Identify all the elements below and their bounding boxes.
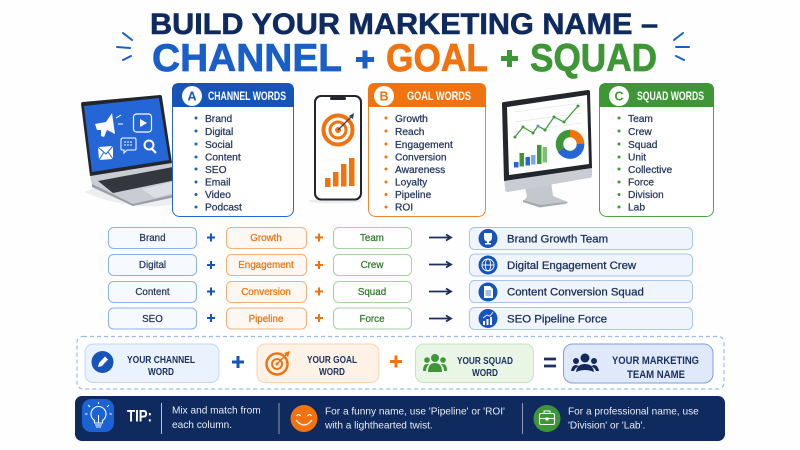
squad word list: Lab (628, 202, 645, 214)
example row 3: Squad (358, 287, 386, 298)
panel: goal words (368, 83, 486, 216)
icon: briefcase (534, 405, 560, 432)
icon: monitor with charts (502, 90, 592, 208)
panel header B: GOAL WORDS (407, 91, 471, 103)
goal word list (384, 114, 453, 214)
icon: light bulb (82, 399, 114, 432)
channel word list: Content (205, 152, 241, 164)
title: BUILD YOUR MARKETING NAME – (150, 8, 658, 41)
example row 3: Content (135, 287, 170, 298)
title: CHANNEL (152, 37, 342, 80)
squad word list: Unit (628, 152, 646, 164)
title: SQUAD (530, 37, 657, 80)
tip 2 text (324, 406, 505, 432)
panel header B: B (379, 90, 389, 104)
example row 2 (108, 254, 692, 276)
channel word list: Digital (205, 127, 233, 138)
example row 1 (108, 228, 692, 250)
example row 2: Digital Engagement Crew (507, 260, 637, 272)
example row 4: Pipeline (249, 314, 284, 325)
formula: goal word (257, 344, 379, 382)
title: GOAL (386, 37, 488, 80)
panel header C: C (614, 90, 624, 104)
panel header B (368, 83, 486, 107)
channel word list (194, 114, 242, 214)
formula: squad word: WORD (472, 368, 498, 379)
squad word list (618, 114, 672, 214)
goal word list: Reach (395, 127, 424, 138)
example row 1: Brand Growth Team (507, 234, 608, 246)
formula: channel word: WORD (148, 367, 174, 378)
panel header A: CHANNEL WORDS (208, 91, 286, 103)
panel: squad words (599, 83, 714, 216)
tip label: TIP: (127, 408, 152, 426)
channel word list: SEO (205, 165, 227, 176)
tip 3 text (568, 406, 699, 432)
goal word list: Growth (395, 114, 428, 125)
example row 3: Content Conversion Squad (507, 286, 644, 298)
equals (544, 359, 556, 366)
example row 1: Brand (139, 233, 166, 244)
squad word list: Force (628, 178, 654, 188)
example row 4: SEO Pipeline Force (507, 314, 607, 326)
icon: left accent marks (117, 33, 132, 60)
tip 3 text: For a professional name, use (568, 406, 699, 418)
goal word list: Awareness (395, 165, 445, 176)
formula: goal word: WORD (319, 367, 345, 378)
plus (390, 356, 402, 368)
formula: squad word: YOUR SQUAD (457, 356, 513, 367)
goal word list: Loyalty (395, 178, 428, 188)
squad word list: Crew (628, 127, 652, 138)
formula panel (77, 336, 724, 389)
panel header C (599, 83, 714, 107)
tip 1 text: each column. (172, 420, 232, 431)
squad word list: Collective (628, 165, 672, 176)
example row 2: Crew (361, 260, 384, 271)
formula: goal word: YOUR GOAL (307, 355, 357, 366)
formula: team name (564, 344, 713, 383)
tip 1 text: Mix and match from (172, 406, 261, 416)
example row 3: Conversion (241, 287, 291, 298)
formula: team name: YOUR MARKETING (612, 355, 699, 367)
example row 4: Force (359, 314, 385, 325)
squad word list: Team (628, 114, 653, 125)
goal word list: Conversion (395, 152, 447, 164)
goal word list: Pipeline (395, 190, 432, 201)
channel word list: Email (205, 178, 230, 188)
panel header C: SQUAD WORDS (637, 91, 704, 103)
title (150, 8, 658, 80)
goal word list: ROI (395, 202, 413, 214)
icon: smiley (290, 405, 318, 432)
example row 4: SEO (142, 314, 163, 325)
panel header A: A (187, 90, 197, 104)
channel word list: Brand (205, 114, 233, 125)
formula: squad word (416, 344, 534, 382)
example row 1: Growth (250, 233, 282, 244)
icon: phone with target and bars (309, 95, 362, 204)
formula: team name: TEAM NAME (627, 369, 685, 381)
squad word list: Division (628, 190, 664, 201)
formula: channel word (85, 344, 219, 382)
tip 3 text: 'Division' or 'Lab'. (568, 420, 645, 432)
tip 2 text: For a funny name, use 'Pipeline' or 'ROI' (325, 406, 505, 418)
example row 2: Engagement (238, 260, 294, 271)
panel header A (172, 83, 294, 107)
channel word list: Podcast (205, 202, 242, 214)
goal word list: Engagement (395, 140, 453, 151)
example row 2: Digital (139, 260, 166, 271)
channel word list: Video (205, 190, 231, 201)
tip 1 text (172, 406, 261, 431)
panel: channel words (172, 83, 294, 216)
icon: laptop (81, 95, 180, 206)
channel word list: Social (205, 140, 233, 151)
plus (232, 356, 244, 368)
formula: channel word: YOUR CHANNEL (127, 355, 195, 366)
tip bar (75, 396, 725, 441)
example row 4 (108, 308, 692, 330)
example row 3 (108, 280, 692, 302)
tip 2 text: with a lighthearted twist. (324, 420, 433, 432)
icon: right accent marks (674, 33, 689, 60)
squad word list: Squad (628, 140, 658, 151)
example row 1: Team (360, 233, 384, 244)
